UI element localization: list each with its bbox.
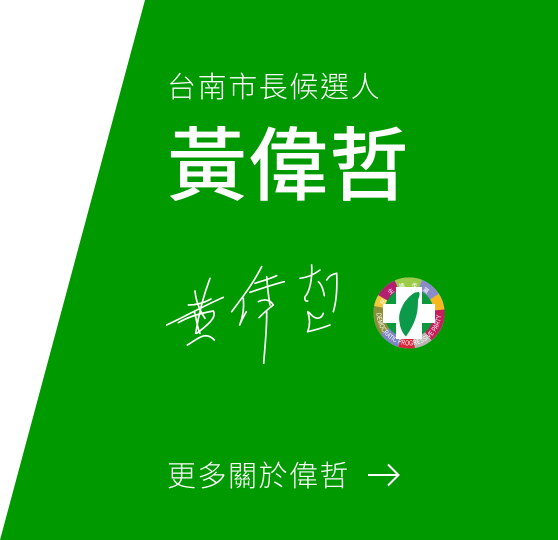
heading: candidate name: 黃偉哲 — [167, 122, 410, 211]
emblem: party name in Chinese: 民 主 進 步 黨 — [380, 282, 430, 304]
subtitle: candidate for Tainan mayor: 台南市長候選人 — [167, 72, 381, 104]
icon: right arrow — [368, 464, 400, 486]
signature — [166, 264, 338, 364]
emblem: party name: DEMOCRATIC PROGRESSIVE PARTY — [376, 313, 442, 346]
emblem: green disc — [384, 288, 434, 338]
emblem: Taiwan island — [399, 292, 420, 336]
emblem: white cross — [383, 287, 435, 339]
link text: more about: 更多關於偉哲 — [167, 461, 350, 493]
icon: Democratic Progressive Party emblem — [373, 277, 445, 348]
emblem: multicolour ring — [379, 283, 439, 343]
